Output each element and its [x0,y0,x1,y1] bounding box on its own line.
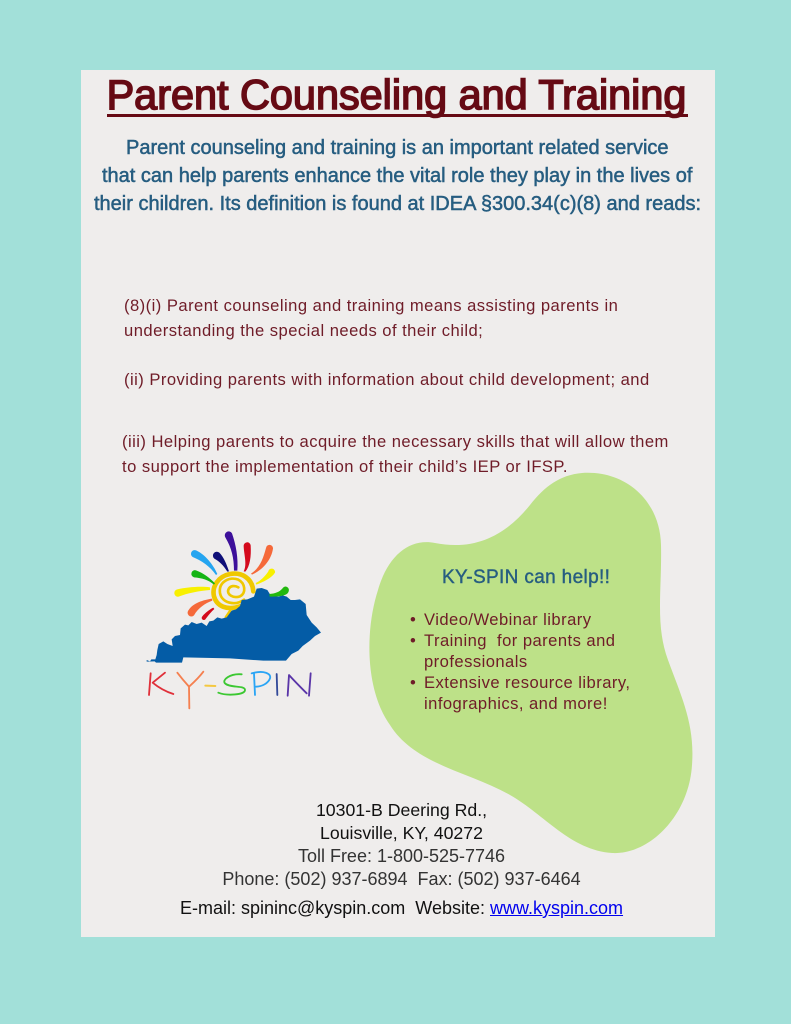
contact block: Toll Free: 1-800-525-7746 [298,846,505,866]
definition item (i): understanding the special needs of their child; [124,321,483,340]
definition item (ii): (ii) Providing parents with information about child development; and [124,370,650,389]
definition item (iii) [122,432,669,476]
intro text: their children. Its definition is found at IDEA §300.34(c)(8) and reads: [94,193,701,215]
sun spiral [214,574,253,617]
callout list: Training for parents and [424,631,615,650]
icon: KY-SPIN logo [146,531,321,710]
title: Parent Counseling and Training [107,72,686,118]
intro text: that can help parents enhance the vital role they play in the lives of [102,165,692,187]
contact block: E-mail: spininc@kyspin.com Website: www.kyspin.com [180,898,623,918]
KY-SPIN lettering [149,672,311,708]
contact block: Phone: (502) 937-6894 Fax: (502) 937-6464 [222,869,581,889]
callout list: • [410,610,416,629]
panel: main card [81,70,715,937]
contact block: Louisville, KY, 40272 [320,823,483,843]
callout heading: KY-SPIN can help!! [442,567,610,588]
callout list: professionals [424,652,528,671]
definition item (i) [124,296,618,340]
intro text [94,137,701,215]
title underline [107,114,688,117]
callout list: • [410,673,416,692]
Kentucky map [147,588,321,663]
contact block [180,800,624,918]
callout list [410,610,630,713]
sun rays [174,531,289,620]
callout: KY-SPIN can help [410,567,630,713]
contact block: 10301-B Deering Rd., [316,800,487,820]
definition item (i): (8)(i) Parent counseling and training means assisting parents in [124,296,618,315]
definition item (iii): (iii) Helping parents to acquire the necessary skills that will allow them [122,432,669,451]
callout list: Extensive resource library, [424,673,630,692]
callout list: • [410,631,416,650]
callout list: Video/Webinar library [424,610,591,629]
definition item (iii): to support the implementation of their child’s IEP or IFSP. [122,457,568,476]
callout list: infographics, and more! [424,694,608,713]
intro text: Parent counseling and training is an important related service [126,137,669,159]
